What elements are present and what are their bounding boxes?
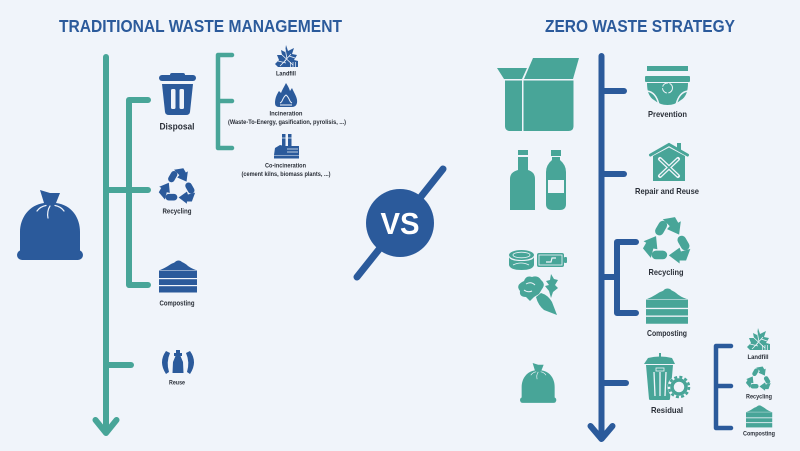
main arrow with branches (96, 55, 232, 433)
icon: residual trash bag (520, 363, 556, 403)
label: residual: Residual (651, 405, 683, 415)
title: zero waste strategy: ZERO WASTE STRATEGY (545, 16, 735, 36)
label: recycling: Recycling (162, 206, 192, 216)
icon: residual bin with gear (644, 353, 690, 400)
panel: traditional waste management (17, 16, 346, 433)
label: incineration: (Waste-To-Energy, gasification, pyrolisis, ...) (228, 120, 346, 126)
title: traditional waste management: TRADITIONAL WASTE MANAGEMENT (59, 16, 342, 36)
panel: zero waste strategy (497, 16, 775, 439)
icon: reuse bottle (162, 350, 194, 374)
icon: cardboard box (497, 58, 579, 131)
label: disposal: Disposal (160, 122, 194, 132)
icon: composting (646, 289, 688, 324)
label: co-incineration (242, 164, 330, 178)
label: incineration (228, 112, 346, 126)
label: composting: Composting (160, 298, 195, 308)
label: composting: Composting (647, 328, 687, 338)
icon: recycling (155, 164, 197, 204)
label: small landfill: Landfill (748, 354, 769, 361)
icon: composting (159, 260, 197, 292)
label: co-incineration: Co-incineration (265, 164, 306, 170)
label: prevention: Prevention (648, 109, 687, 119)
icon: prevention diaper (645, 66, 690, 105)
label: co-incineration: (cement kilns, biomass plants, ...) (242, 172, 330, 178)
icon: vegetables (518, 274, 558, 315)
icon: small recycling (743, 364, 772, 391)
icon: landfill (275, 45, 298, 67)
label: repair and reuse: Repair and Reuse (635, 186, 699, 196)
icon: small composting (746, 405, 772, 427)
icon: trash bag (17, 190, 83, 260)
label: reuse: Reuse (169, 380, 186, 386)
icon: disposal bin (159, 73, 196, 115)
label: small recycling: Recycling (746, 394, 772, 400)
icon: co-incineration factory (274, 134, 299, 158)
icon: incineration flame (275, 83, 297, 107)
label: small composting: Composting (743, 430, 775, 438)
icon: small landfill (747, 328, 770, 350)
icon: bottles (510, 150, 566, 210)
label: incineration: Incineration (270, 112, 303, 118)
icon: can and battery (509, 250, 567, 270)
main arrow with branches (590, 56, 731, 439)
VS badge (357, 169, 443, 277)
label: recycling: Recycling (648, 267, 684, 277)
icon: repair house (650, 143, 688, 181)
VS badge: VS (380, 206, 420, 241)
label: landfill: Landfill (276, 72, 296, 78)
icon: recycling (638, 212, 693, 264)
